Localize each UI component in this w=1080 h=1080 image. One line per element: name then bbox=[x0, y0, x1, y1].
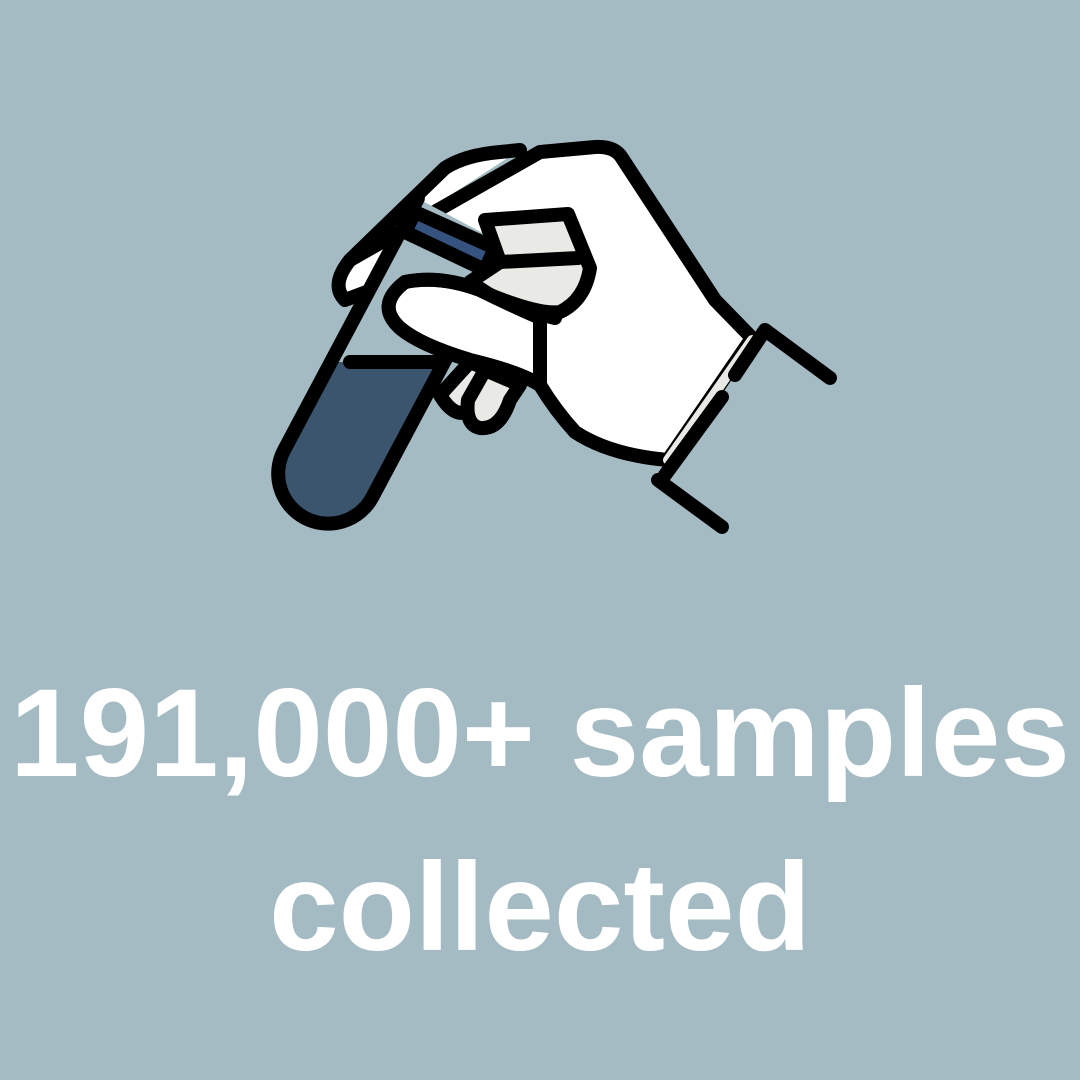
hand back bbox=[339, 147, 752, 460]
heading line 1: 191,000+ samples bbox=[10, 664, 1070, 803]
thumb bbox=[389, 280, 540, 385]
heading line 2: collected bbox=[269, 838, 811, 977]
icon: gloved hand holding test tube bbox=[271, 140, 837, 534]
test tube bbox=[271, 197, 483, 531]
index finger bbox=[470, 214, 590, 312]
wrist shading bbox=[668, 340, 752, 460]
tube cap bbox=[405, 212, 495, 270]
lower fingers bbox=[440, 362, 520, 428]
cuff bbox=[658, 330, 830, 527]
